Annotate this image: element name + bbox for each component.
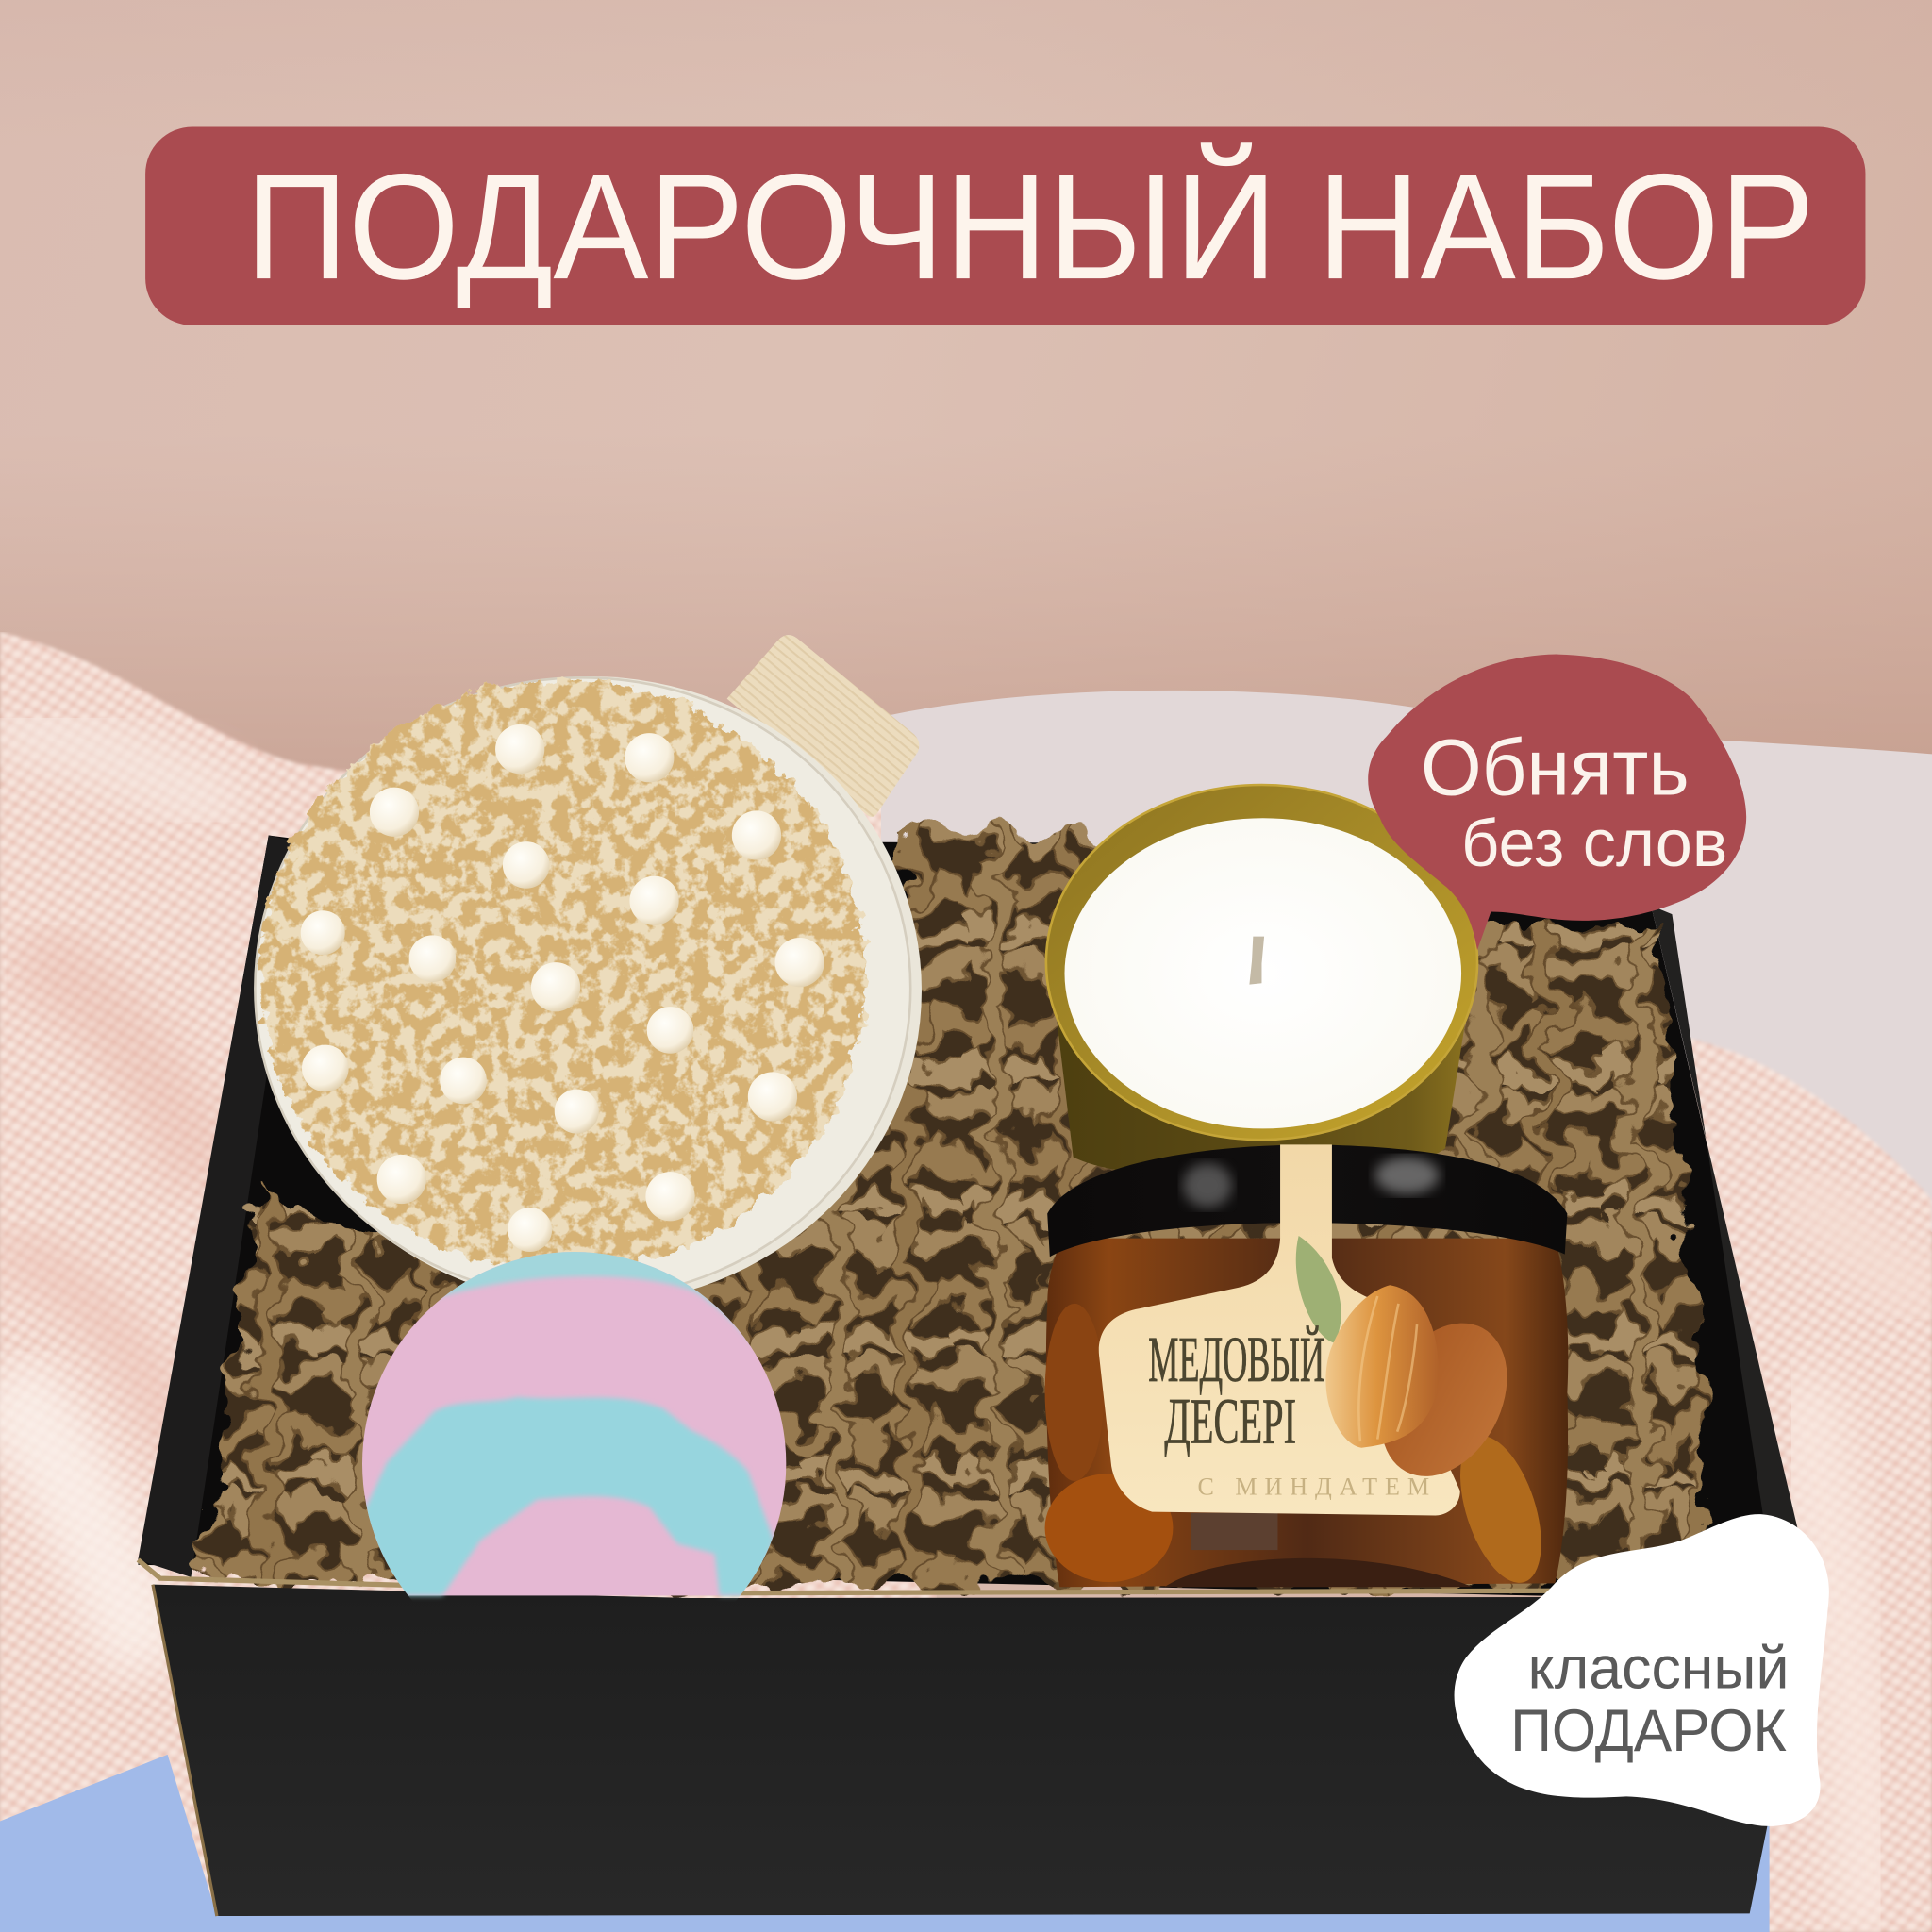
box interior bbox=[138, 836, 1814, 1602]
candle wick bbox=[1249, 937, 1264, 985]
box front panel bbox=[153, 1585, 1814, 1916]
bubble text line 2: без слов bbox=[1461, 806, 1727, 880]
box inner left wall bbox=[138, 836, 302, 1577]
scented candle bbox=[1046, 785, 1477, 1180]
jar label bbox=[1099, 1144, 1460, 1516]
white sticker bbox=[1455, 1514, 1829, 1826]
jar lid bbox=[1047, 1144, 1567, 1257]
almond front bbox=[1325, 1285, 1439, 1448]
brush bristles bbox=[260, 680, 866, 1272]
sticker text line 2: ПОДАРОК bbox=[1510, 1698, 1787, 1764]
blue corner background bbox=[0, 1725, 1770, 1932]
candle wax bbox=[1064, 818, 1461, 1128]
crinkle paper filling bbox=[197, 828, 1710, 1587]
almond leaf bbox=[1296, 1236, 1341, 1343]
brush pearl pins bbox=[301, 724, 824, 1252]
candle rim bbox=[1046, 785, 1477, 1140]
gift box bbox=[138, 828, 1814, 1916]
box left flap edge bbox=[153, 1585, 217, 1916]
title text: ПОДАРОЧНЫЙ НАБОР bbox=[245, 142, 1815, 310]
brush body bbox=[258, 676, 922, 1305]
brush strap bbox=[727, 635, 919, 817]
blanket: pink left bbox=[0, 632, 937, 1932]
honey nuts inside bbox=[1045, 1474, 1173, 1582]
honey jar bbox=[1045, 1144, 1568, 1592]
sticker text line 1: классный bbox=[1528, 1635, 1789, 1701]
speech bubble bbox=[1368, 655, 1746, 950]
candle tin body bbox=[1050, 961, 1474, 1180]
label text: медовый: МЕДОВЫЙ bbox=[1148, 1323, 1324, 1395]
blanket: grey-white right bbox=[881, 691, 1932, 1232]
bath bomb bbox=[358, 1232, 789, 1595]
title banner bbox=[145, 127, 1865, 325]
massage brush bbox=[255, 635, 922, 1305]
label text: десерт: ДЕСЕРІ bbox=[1164, 1384, 1296, 1457]
blanket: pink lower right bbox=[1688, 1038, 1932, 1932]
bomb turquoise bands bbox=[362, 1232, 789, 1595]
label text: с миндалем: С МИНДАТЕМ bbox=[1198, 1473, 1429, 1500]
box inner right wall bbox=[1651, 906, 1814, 1597]
box front lip bbox=[138, 1560, 1814, 1593]
bubble text line 1: Обнять bbox=[1421, 722, 1690, 811]
jar body bbox=[1046, 1239, 1568, 1587]
almond back bbox=[1384, 1323, 1507, 1476]
